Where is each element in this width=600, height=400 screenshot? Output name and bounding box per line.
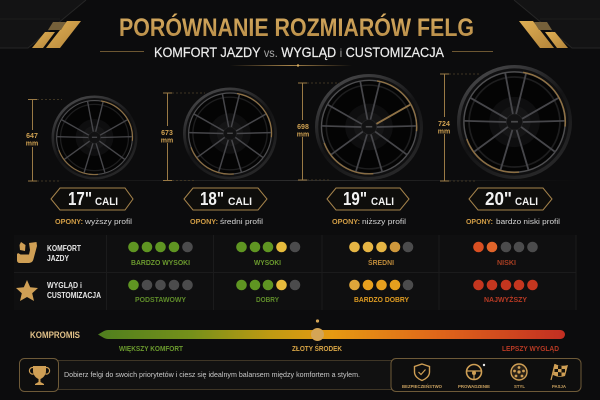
dimension 673 mm: mm [161, 138, 173, 144]
icon: safety shield: BEZPIECZEŃSTWO [402, 382, 442, 390]
size badge 20: 20" [485, 189, 512, 209]
tire profile 17 [55, 217, 132, 226]
rating: style 18 [236, 280, 300, 304]
slider marker [311, 319, 324, 341]
wheel 17 [52, 96, 138, 180]
row label: wygląd i customizacja [47, 281, 101, 300]
size badge 18 [184, 188, 267, 210]
wheel 20 [457, 65, 572, 179]
size badge 18: 18" [200, 189, 224, 209]
wheel 19 [315, 74, 423, 180]
icon: star [16, 280, 38, 301]
icon: trophy [20, 358, 58, 392]
column: 20 inch [436, 65, 572, 226]
ground line [30, 180, 580, 181]
tire profile 18: średni profil [220, 217, 263, 226]
column: 17 inch [24, 96, 138, 226]
dimension 647 mm: mm [26, 140, 38, 148]
icon: checkered flag [551, 364, 568, 390]
tire profile 17: OPONY: [55, 217, 83, 226]
gradient bar [98, 330, 565, 339]
dimension 647 mm: 647 [26, 133, 38, 140]
top left corner decoration [0, 0, 86, 48]
dimension 698 mm: mm [297, 132, 309, 138]
tire profile 20: OPONY: [466, 217, 493, 226]
rating: style 17: PODSTAWOWY [135, 297, 186, 304]
icon: left gold logo [32, 21, 81, 48]
rating: style 19 [349, 280, 413, 304]
tire profile 18: OPONY: [190, 217, 218, 226]
icon: safety shield [402, 364, 442, 390]
icon: right gold logo [519, 21, 568, 48]
panel: rating table [14, 235, 576, 310]
rating: style 20: NAJWYŻSZY [484, 296, 527, 304]
rating: comfort 19 [349, 242, 413, 267]
tire profile 20: bardzo niski profil [496, 217, 560, 226]
wheel 18 [183, 88, 277, 180]
rating: comfort 18: WYSOKI [254, 260, 281, 267]
tire profile 20 [466, 217, 560, 226]
row label: wygląd i customizacja: CUSTOMIZACJA [47, 291, 101, 300]
tire profile 19 [332, 217, 406, 226]
size badge 17: CALI [95, 196, 118, 208]
scale label left: WIĘKSZY KOMFORT [119, 346, 184, 353]
dimension 673 mm: 673 [161, 130, 173, 137]
tire profile 19: niższy profil [362, 217, 406, 226]
tire profile 19: OPONY: [332, 217, 360, 226]
rating: style 17 [128, 280, 193, 304]
size badge 20 [469, 188, 552, 210]
panel: message [20, 358, 392, 392]
heading: kompromis: KOMPROMIS [30, 330, 80, 340]
icon: steering wheel: PROWADZENIE [458, 384, 491, 390]
subtitle: KOMFORT JAZDY vs. WYGLĄD i CUSTOMIZACJA [154, 44, 445, 60]
rating: style 18: DOBRY [256, 297, 279, 304]
tire profile 18 [190, 217, 263, 226]
rating: comfort 20: NISKI [497, 260, 516, 267]
top right corner decoration [514, 0, 600, 48]
scale label centre: ZŁOTY ŚRODEK [292, 344, 342, 353]
column: 18 inch [159, 88, 277, 226]
row label: wygląd i customizacja: WYGLĄD i [47, 281, 82, 290]
rating: style 20 [473, 280, 538, 304]
dimension 698 mm [295, 83, 340, 180]
icon: rim [511, 364, 527, 390]
column: 19 inch [295, 74, 423, 226]
size badge 18: CALI [228, 196, 252, 208]
rating: comfort 17: BARDZO WYSOKI [131, 260, 190, 267]
rating: comfort 17 [128, 242, 193, 267]
scale label right: LEPSZY WYGLĄD [502, 346, 559, 353]
size badge 19 [327, 188, 409, 210]
dimension 724 mm [436, 74, 480, 181]
row label: komfort jazdy: KOMFORT [47, 244, 81, 253]
icon: steering wheel [458, 364, 491, 390]
size badge 20: CALI [515, 196, 538, 208]
size badge 19: CALI [371, 196, 394, 208]
rating: style 19: BARDZO DOBRY [354, 297, 409, 304]
title: PORÓWNANIE ROZMIARÓW FELG [119, 12, 474, 42]
row label: komfort jazdy: JAZDY [47, 254, 70, 263]
dimension 724 mm: 724 [438, 121, 450, 128]
dimension 724 mm: mm [438, 128, 450, 136]
row label: komfort jazdy [47, 244, 81, 263]
size badge 17: 17" [68, 189, 92, 209]
rating: comfort 20 [473, 242, 538, 267]
dimension 647 mm [24, 100, 62, 181]
compromise scale [30, 319, 565, 353]
tire profile 17: wyższy profil [84, 217, 132, 226]
dimension 698 mm: 698 [297, 124, 309, 131]
rating: comfort 19: ŚREDNI [368, 258, 394, 267]
icon: checkered flag: PASJA [552, 384, 566, 390]
panel: value icons [391, 358, 581, 392]
size badge 19: 19" [343, 189, 367, 209]
icon: car seat [17, 242, 37, 263]
size badge 17 [51, 188, 133, 210]
message text: Dobierz felgi do swoich priorytetów i ciesz się idealnym balansem między komfortem a stylem. [64, 370, 360, 379]
icon: rim: STYL [514, 384, 525, 390]
dimension 673 mm [159, 93, 205, 180]
rating: comfort 18 [236, 242, 300, 267]
